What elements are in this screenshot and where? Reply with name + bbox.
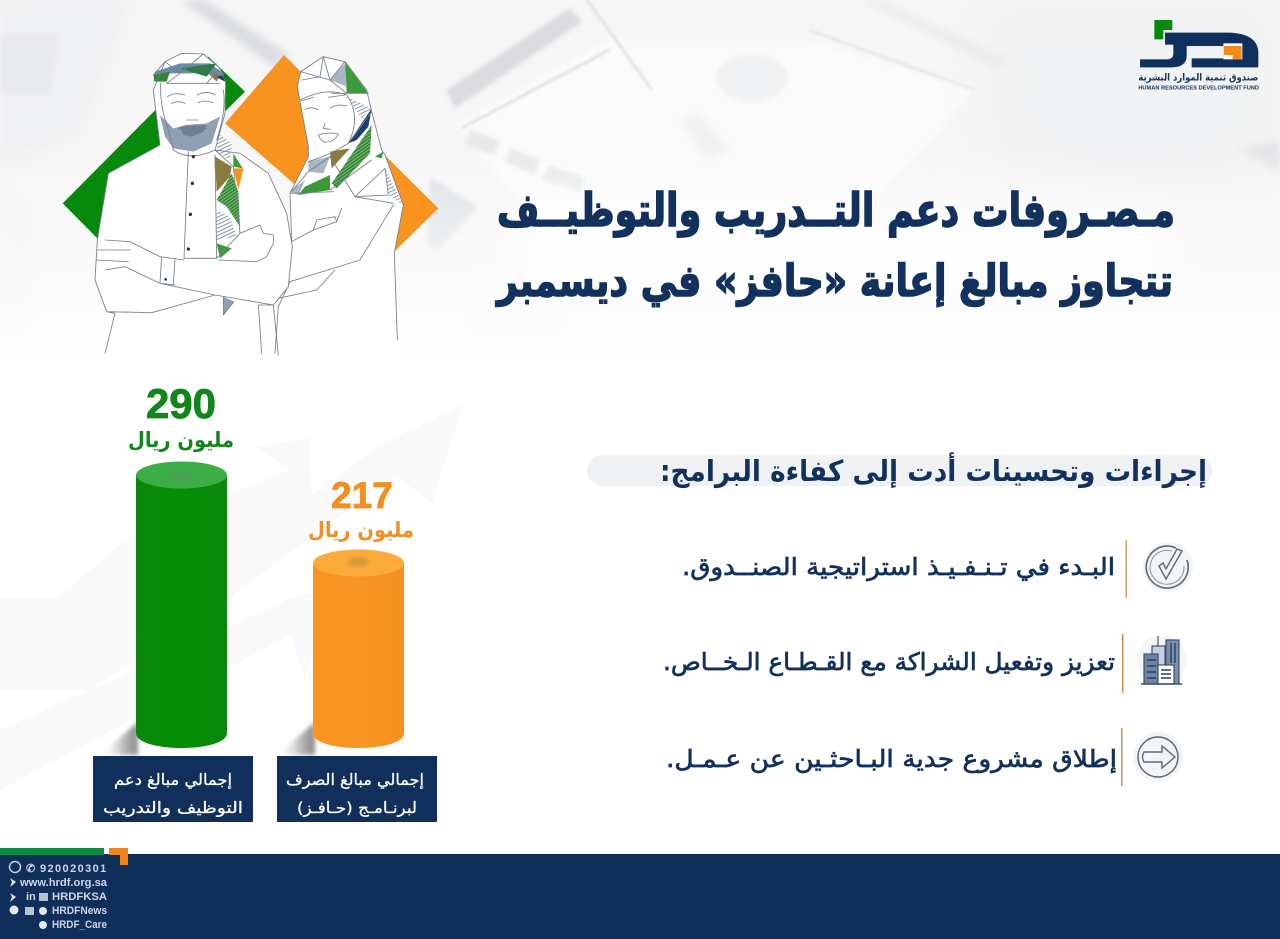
orange diamond: [225, 55, 438, 253]
value 290: 290: [146, 380, 216, 427]
item 2: [663, 634, 1187, 693]
label: training: التوظيف والتدريب: [103, 799, 243, 818]
icon: arrow: [1133, 732, 1183, 782]
item 1: البـدء في تـنـفـيـذ استراتيجية الصنــدوق.: [682, 553, 1115, 581]
contact lines: HRDFKSA: [52, 891, 107, 903]
unit orange: مليون ريال: [308, 518, 414, 542]
label: training: إجمالي مبالغ دعم: [114, 771, 232, 790]
footer accent: green strip: [0, 848, 104, 855]
contact lines: 920020301: [40, 863, 108, 875]
green cylinder: [136, 462, 227, 748]
contact lines: HRDFNews: [52, 905, 107, 917]
figure: woman: [275, 57, 403, 355]
item 1: [682, 540, 1193, 598]
label: hafiz: [277, 756, 437, 822]
icon: buildings: [1137, 635, 1187, 685]
label: training: [93, 756, 253, 822]
contact lines: ✆: [26, 863, 35, 875]
figure: man: [95, 53, 292, 355]
item 3: [666, 728, 1183, 786]
bar shadows: [100, 722, 315, 755]
value 217: 217: [331, 475, 393, 516]
bar chart: [93, 380, 437, 822]
label: hafiz: إجمالي مبالغ الصرف: [286, 771, 424, 790]
logo: HRDF: [1138, 20, 1259, 92]
logo: HRDF: صندوق تنمية الموارد البشرية: [1138, 73, 1258, 84]
green diamond: [63, 57, 245, 238]
item 2: تعزيز وتفعيل الشراكة مع القـطـاع الـخــاص.: [663, 648, 1115, 676]
logo: HRDF: HUMAN RESOURCES DEVELOPMENT FUND: [1138, 86, 1259, 92]
section heading: إجراءات وتحسينات أدت إلى كفاءة البرامج:: [660, 452, 1207, 489]
footer accent: orange corner: [109, 848, 128, 865]
orange cylinder: [313, 550, 404, 748]
contact lines: HRDF_Care: [52, 919, 107, 931]
label: hafiz: لبرنـامـج (حـافـز): [297, 799, 417, 817]
background arrows: [0, 405, 463, 790]
title: [495, 183, 1175, 307]
item 3: إطلاق مشروع جدية البـاحثـين عن عـمـل.: [666, 745, 1117, 774]
contact lines: [10, 862, 108, 931]
unit green: مليون ريال: [128, 428, 234, 452]
footer band: [0, 848, 1280, 939]
icon: check: [1143, 542, 1193, 592]
illustration: man and woman with diamonds: [63, 53, 438, 355]
contact lines: in: [26, 891, 36, 903]
contact lines: www.hrdf.org.sa: [19, 877, 108, 889]
